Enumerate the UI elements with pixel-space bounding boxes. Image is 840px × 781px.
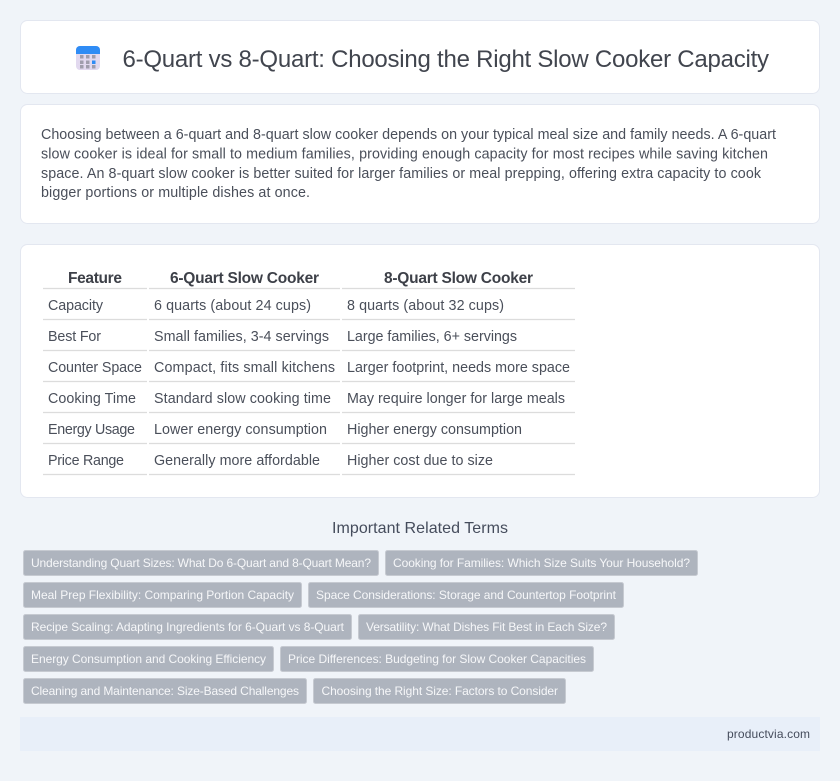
- chip: Cleaning and Maintenance: Size-Based Challenges: [31, 684, 299, 698]
- chip: Space Considerations: Storage and Countertop Footprint: [316, 588, 617, 602]
- row: counter space: Larger footprint, needs more space: [347, 360, 570, 376]
- chip: [280, 646, 594, 672]
- row: capacity: [48, 298, 504, 314]
- chip: Understanding Quart Sizes: What Do 6-Quart and 8-Quart Mean?: [31, 556, 371, 570]
- chip: [24, 646, 274, 672]
- header panel: [20, 20, 820, 94]
- table header: Feature: [68, 270, 122, 287]
- row: best for: Small families, 3-4 servings: [154, 329, 329, 345]
- panel: comparison table: [20, 244, 820, 498]
- row: price range: Generally more affordable: [154, 453, 320, 469]
- chip: Versatility: What Dishes Fit Best in Each Size?: [366, 620, 607, 634]
- icon: calendar: [76, 46, 100, 70]
- chip: [314, 678, 566, 704]
- chip: [24, 678, 306, 704]
- chip: [386, 550, 698, 576]
- chip: [308, 582, 624, 608]
- panel: introduction: [20, 104, 820, 224]
- row: price range: [48, 453, 493, 469]
- chip: Choosing the Right Size: Factors to Consider: [322, 684, 558, 698]
- table header: 6-Quart Slow Cooker: [170, 270, 319, 287]
- row: energy usage: Lower energy consumption: [154, 422, 327, 438]
- row: best for: Best For: [48, 329, 101, 345]
- chip: [24, 614, 352, 640]
- chip: Price Differences: Budgeting for Slow Cooker Capacities: [288, 652, 586, 666]
- row: energy usage: [48, 422, 522, 438]
- row: price range: Price Range: [48, 453, 124, 469]
- row: energy usage: Energy Usage: [48, 422, 135, 438]
- row: counter space: [48, 360, 570, 376]
- heading: important related terms: Important Related Terms: [332, 520, 508, 537]
- related term chips: [24, 550, 698, 704]
- intro paragraph: slow cooker is ideal for small to medium families, providing enough capacity for most recipes while saving kitchen: [41, 146, 768, 162]
- row: best for: Large families, 6+ servings: [347, 329, 517, 345]
- row: counter space: Compact, fits small kitchens: [154, 360, 335, 376]
- chip: [24, 550, 378, 576]
- chip: Meal Prep Flexibility: Comparing Portion Capacity: [31, 588, 294, 602]
- source label: productvia.com: [727, 727, 810, 741]
- table header: [68, 270, 533, 287]
- row: cooking time: May require longer for large meals: [347, 391, 565, 407]
- chip: Recipe Scaling: Adapting Ingredients for 6-Quart vs 8-Quart: [31, 620, 345, 634]
- chip: [24, 582, 302, 608]
- title: 6-Quart vs 8-Quart: Choosing the Right Slow Cooker Capacity: [122, 46, 769, 73]
- row: capacity: Capacity: [48, 298, 104, 314]
- row: best for: [48, 329, 517, 345]
- row: cooking time: Standard slow cooking time: [154, 391, 331, 407]
- intro paragraph: [41, 127, 776, 201]
- row: capacity: 8 quarts (about 32 cups): [347, 298, 504, 314]
- table header: 8-Quart Slow Cooker: [384, 270, 533, 287]
- intro paragraph: Choosing between a 6-quart and 8-quart slow cooker depends on your typical meal size and family needs. A 6-quart: [41, 127, 776, 143]
- footer: [20, 717, 820, 751]
- chip: Cooking for Families: Which Size Suits Your Household?: [393, 556, 690, 570]
- chip: Energy Consumption and Cooking Efficiency: [31, 652, 266, 666]
- row: cooking time: [48, 391, 565, 407]
- row: counter space: Counter Space: [48, 360, 142, 376]
- row: energy usage: Higher energy consumption: [347, 422, 522, 438]
- intro paragraph: space. An 8-quart slow cooker is better suited for larger families or meal prepping, offering extra capacity to cook: [41, 166, 762, 182]
- chip: [358, 614, 614, 640]
- row: capacity: 6 quarts (about 24 cups): [154, 298, 311, 314]
- intro paragraph: bigger portions or multiple dishes at once.: [41, 185, 310, 201]
- row: cooking time: Cooking Time: [48, 391, 136, 407]
- row: price range: Higher cost due to size: [347, 453, 493, 469]
